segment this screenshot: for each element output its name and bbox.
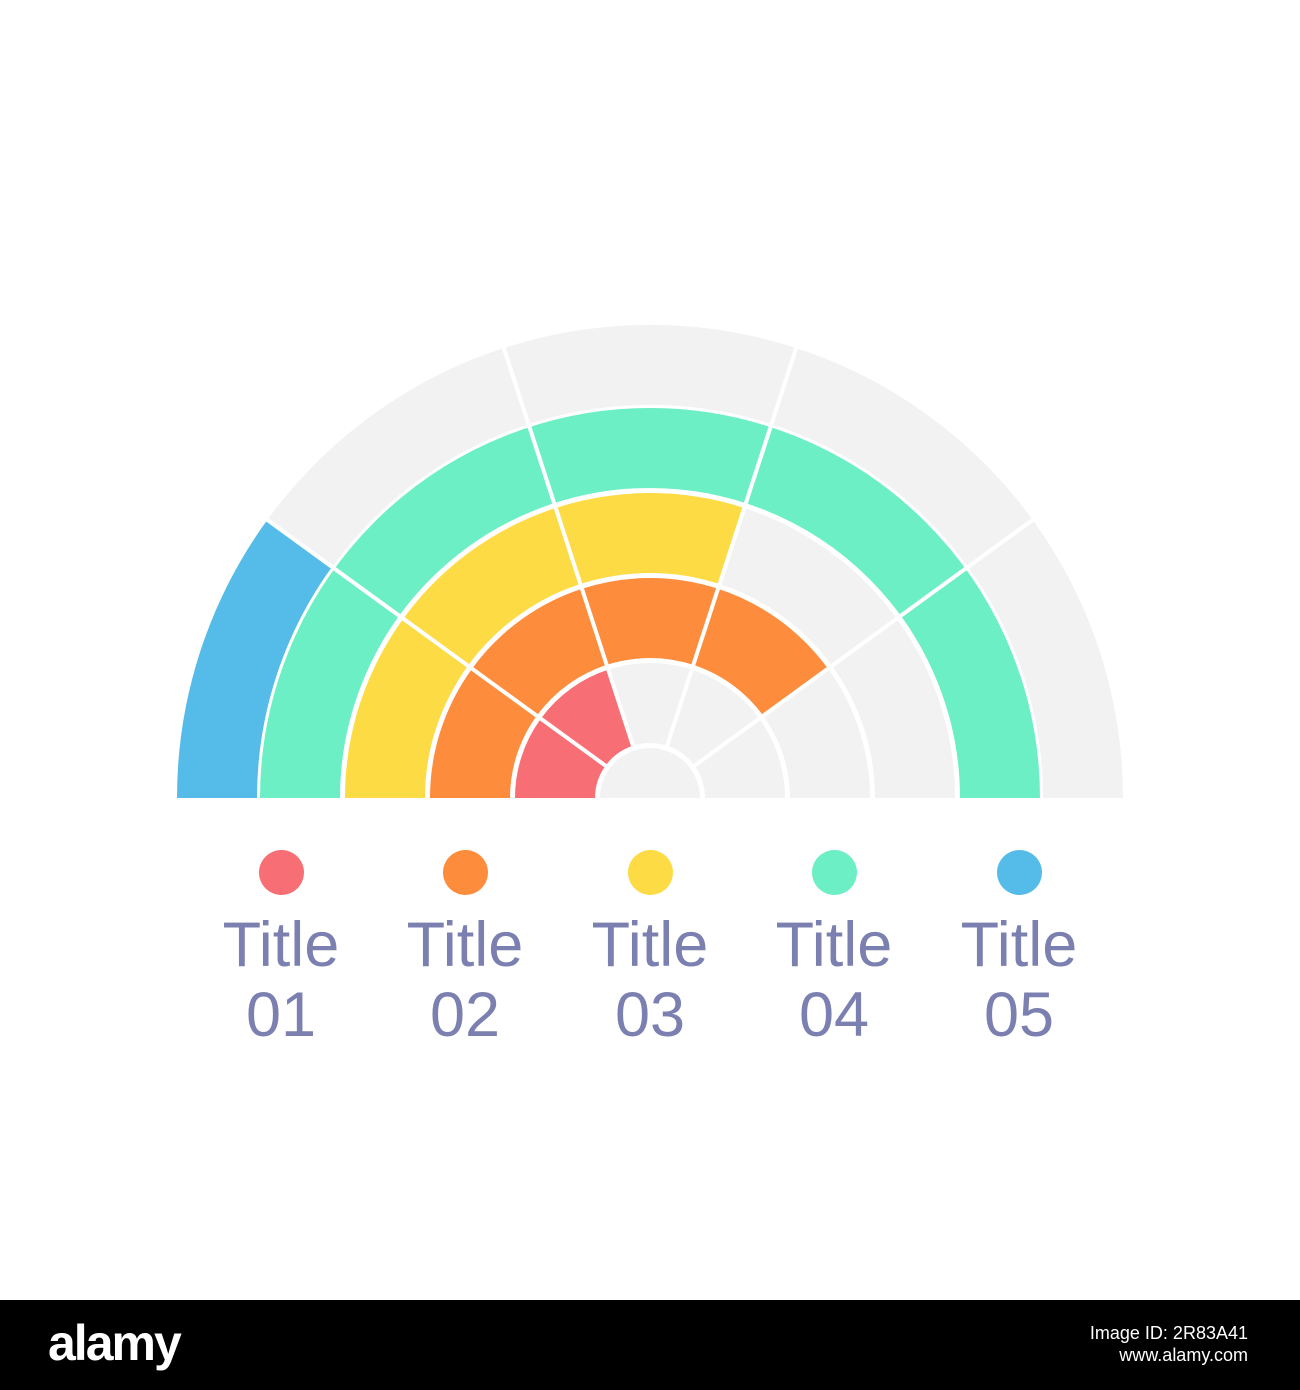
image id: Image ID: 2R83A41 — [1090, 1323, 1248, 1343]
ring 1: red — [555, 703, 745, 798]
legend item 04 — [776, 850, 892, 1050]
ring 2: orange — [470, 618, 830, 798]
legend item 03 — [592, 850, 708, 1050]
legend item 02 — [407, 850, 523, 1050]
legend item 04: Title — [776, 910, 892, 980]
ring 5: blue — [217, 365, 1083, 798]
legend item 03: Title — [592, 910, 708, 980]
legend item 01: 01 — [246, 980, 316, 1050]
legend item 05: 05 — [984, 980, 1054, 1050]
image id: www.alamy.com — [1119, 1345, 1248, 1365]
ring 4: green — [300, 448, 1000, 798]
watermark logo: alamy — [48, 1315, 180, 1371]
legend item 01 — [223, 850, 339, 1050]
center hole — [600, 748, 700, 798]
ring 3: yellow — [385, 533, 915, 798]
legend item 05: Title — [961, 910, 1077, 980]
legend item 03: 03 — [615, 980, 685, 1050]
legend item 02: Title — [407, 910, 523, 980]
legend item 04: 04 — [799, 980, 869, 1050]
footer bar — [0, 1300, 1300, 1390]
image id — [1090, 1323, 1248, 1365]
legend item 05 — [961, 850, 1077, 1050]
legend item 02: 02 — [430, 980, 500, 1050]
legend item 01: Title — [223, 910, 339, 980]
